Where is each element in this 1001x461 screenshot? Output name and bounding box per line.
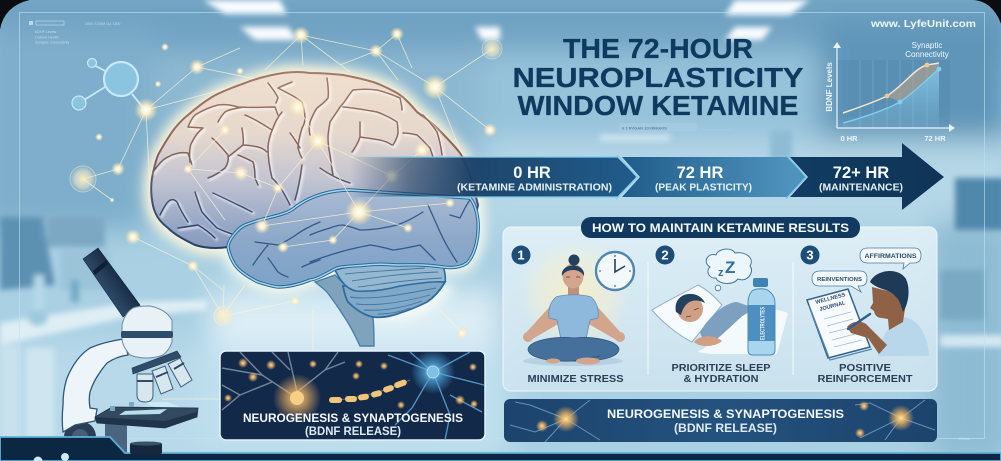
badge 3: 3 [806, 248, 814, 262]
brain stem [315, 275, 374, 346]
chart: BDNF levels: 0 HR [840, 134, 858, 143]
small corner label: VISUAL [958, 437, 971, 441]
HUD legend: Cellular Health [35, 36, 59, 40]
title: WINDOW KETAMINE [518, 90, 798, 121]
segment: 72+ hr: (MAINTENANCE) [819, 182, 903, 194]
axes [837, 46, 951, 128]
sleeping person [652, 285, 788, 354]
BDNF curve [843, 69, 939, 123]
label: hydration: & HYDRATION [684, 373, 758, 385]
subtitle tag: 6 1 RVGAN 1DX8NGKIS [622, 126, 667, 130]
timeline arrow [350, 143, 944, 210]
segment: 72+ hr: 72+ HR [833, 164, 889, 182]
subtitle tag: ................................ [701, 126, 732, 130]
label: prioritize sleep: PRIORITIZE SLEEP [672, 362, 770, 374]
area under curve [850, 71, 939, 122]
chart: BDNF levels: Synaptic [912, 41, 942, 50]
title: NEUROPLASTICITY [512, 62, 804, 93]
affirmations bubble: AFFIRMATIONS [864, 254, 916, 260]
synaptic curve [843, 63, 939, 113]
panel heading [581, 217, 860, 238]
panel heading: HOW TO MAINTAIN KETAMINE RESULTS [592, 221, 849, 235]
light beam [145, 402, 185, 410]
eyepiece tube [83, 248, 140, 317]
segment: 72 hr [622, 155, 806, 199]
column [105, 424, 127, 454]
segment: 72 hr: (PEAK PLASTICITY) [655, 182, 752, 194]
cerebrum [151, 72, 478, 270]
sulci highlights [155, 62, 444, 240]
segment: 0 hr: 0 HR [513, 164, 551, 182]
thought cloud: z [718, 267, 724, 279]
glowing network nodes [70, 26, 502, 339]
objective stand [130, 442, 162, 454]
focus knob [64, 421, 96, 453]
wellness journal: JOURNAL [819, 300, 847, 313]
subtitle tag [622, 127, 732, 130]
segment: 72 hr: 72 HR [677, 164, 723, 182]
label: minimize stress: MINIMIZE STRESS [528, 373, 624, 385]
brain glow [151, 72, 478, 316]
icon: water bottle: ELECTROLYTES [760, 307, 766, 340]
bottom dots [34, 453, 69, 461]
arm and pen [847, 314, 887, 354]
thought cloud [706, 249, 752, 291]
HUD legend: Synaptic Connectivity [35, 40, 70, 44]
banner: neurogenesis right: (BDNF RELEASE) [674, 421, 777, 435]
objective ring [132, 351, 181, 374]
thought cloud: Z [725, 258, 735, 277]
microscope [62, 248, 198, 454]
objective lenses [137, 358, 192, 402]
stage [95, 402, 198, 428]
badge 1: 1 [517, 248, 525, 262]
neuron illustration [222, 350, 484, 440]
chart: BDNF levels [825, 41, 955, 143]
icon: clock [596, 252, 634, 290]
panel: neurogenesis left: NEUROGENESIS & SYNAPTOGENESIS [243, 413, 463, 425]
label: reinforcement: REINFORCEMENT [818, 373, 913, 385]
neural network lines behind brain [83, 34, 492, 399]
step 3: positive reinforcement [800, 246, 929, 385]
chart: BDNF levels: Connectivity [905, 50, 949, 59]
HUD legend [29, 21, 120, 44]
website url: www. LyfeUnit.com [870, 19, 976, 30]
badge 2: 2 [661, 248, 669, 262]
banner: neurogenesis right [504, 399, 937, 442]
HUD legend: 2000 2100M 111 1200 [85, 22, 120, 26]
temporal lobe [228, 190, 478, 287]
step 1: minimize stress [512, 239, 634, 385]
slide [119, 409, 167, 415]
HUD legend: BDNF Levels [35, 30, 56, 34]
label: positive: POSITIVE [839, 362, 891, 374]
banner neurons [510, 400, 935, 442]
panel: how to maintain ketamine results [503, 217, 937, 391]
panel: neurogenesis left [220, 350, 485, 440]
badge 1 [512, 246, 530, 264]
writing person [870, 271, 929, 356]
meditating person [523, 254, 625, 366]
title: THE 72-HOUR [563, 33, 753, 64]
arm [62, 339, 128, 432]
bottom bar [0, 437, 1001, 461]
molecule icon [72, 58, 145, 110]
segment: 0 hr: (KETAMINE ADMINISTRATION) [457, 182, 612, 194]
chart: BDNF levels: 72 HR [924, 134, 946, 143]
cerebellum [335, 262, 445, 317]
wellness journal: WELLNESS [815, 292, 846, 306]
network lines over brain [188, 107, 450, 247]
step 2: prioritize sleep and hydration [652, 246, 788, 385]
chart: BDNF levels: BDNF Levels [825, 62, 834, 112]
brain [151, 60, 478, 346]
panel: neurogenesis left: (BDNF RELEASE) [305, 426, 401, 438]
title [514, 38, 804, 116]
segment: 0 hr [350, 155, 637, 199]
microscope head [121, 306, 173, 358]
reinforcement bubble: REINVENTIONS [817, 277, 862, 283]
brain sulci [153, 60, 442, 238]
banner: neurogenesis right: NEUROGENESIS & SYNAPTOGENESIS [607, 407, 844, 421]
segment: 72+ hr [790, 143, 944, 210]
wellness journal [807, 289, 872, 360]
